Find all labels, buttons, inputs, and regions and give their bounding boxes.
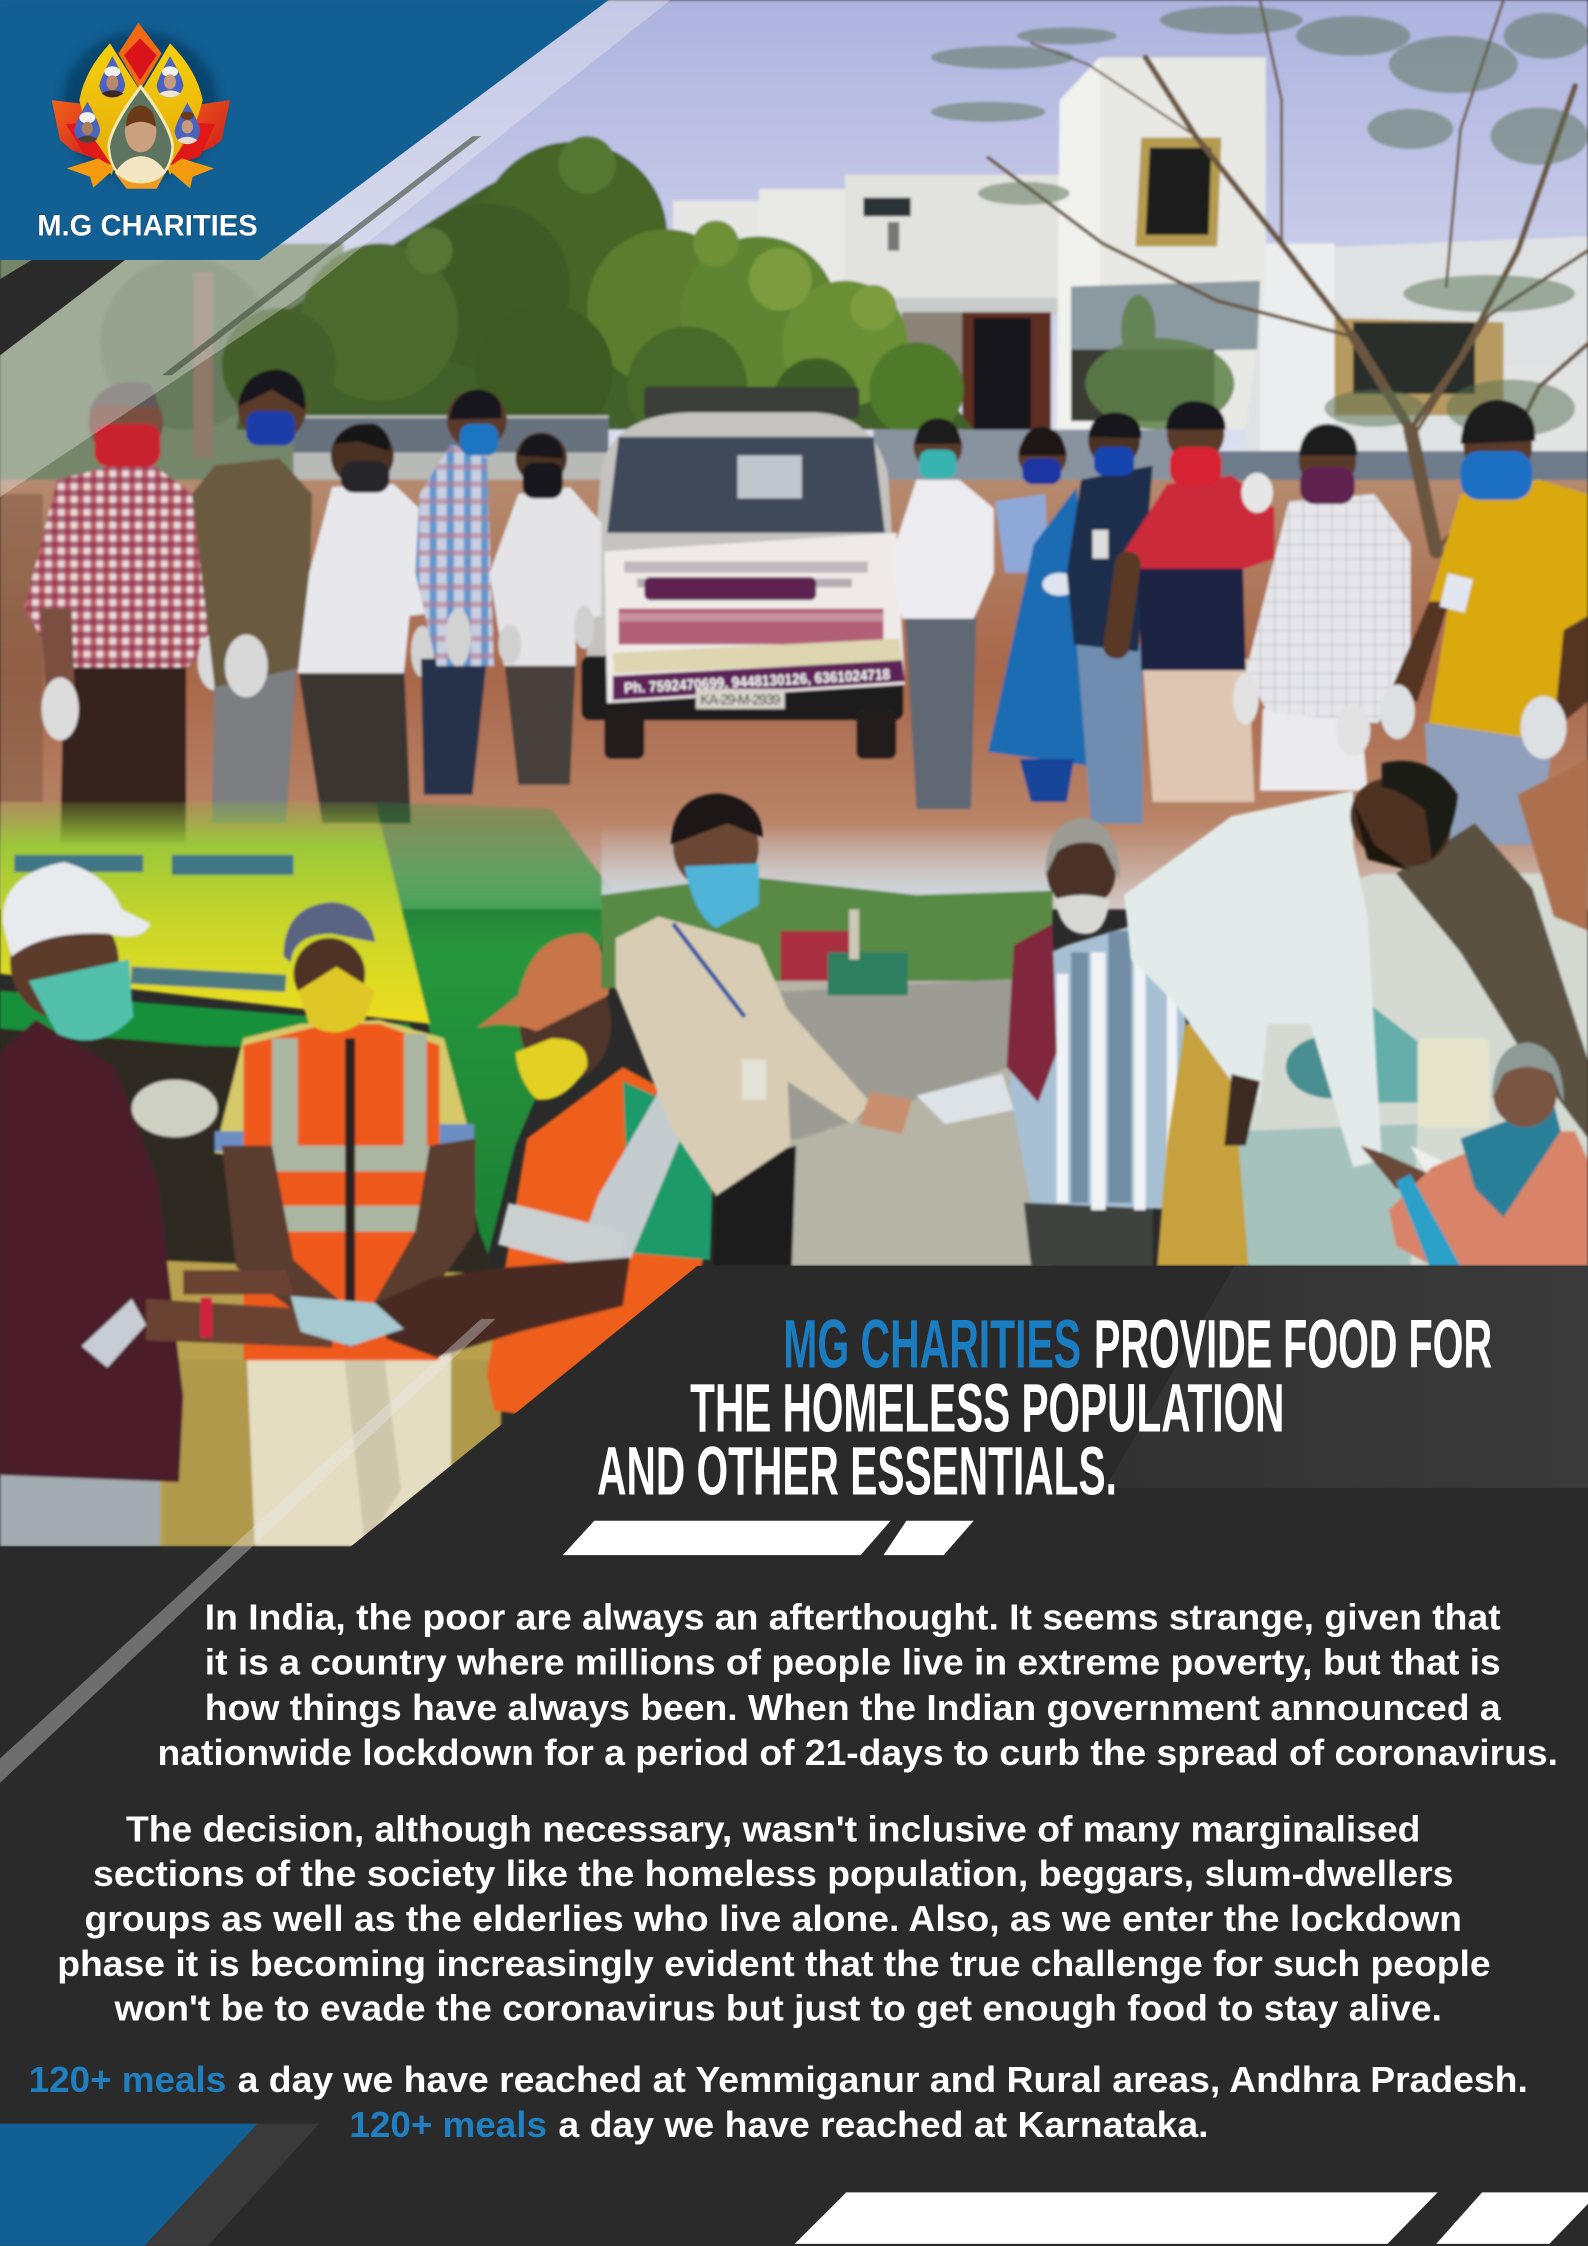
compound wall [294,415,1588,501]
elderly man in striped shirt [916,818,1191,1266]
sack under truck [132,1080,218,1137]
volunteer in cream shirt with blue mask [616,793,912,1266]
text block: paragraph two: The decision, although necessary, wasn't inclusive of many marginalised [126,1810,1420,1850]
soft sky patch [601,823,1074,895]
truck lower green band [0,991,437,1053]
diagonal light stripe [0,1319,495,1783]
shrub by tower [1085,295,1234,430]
translucent diagonal haze over top left of photo [0,0,670,497]
road [716,981,1052,1266]
central portrait drop [107,84,174,183]
volunteer in white shirt with black face cover [490,433,601,785]
ground [0,480,1588,909]
central tree canopy [222,136,974,447]
white slanted bars bottom right [795,2192,1588,2244]
sky [0,0,1588,487]
lighter angled panel behind heading [1105,1266,1588,1488]
man in red and navy t-shirt [1102,401,1274,802]
diagonal dark line in haze [162,136,481,375]
heading [597,1306,1492,1509]
photo: man handing food to elderly woman [1124,759,1588,1266]
top petal [118,23,162,90]
text block: paragraph one: how things have always been. When the Indian government announced a [205,1688,1502,1728]
inner petals [66,123,215,189]
text block: paragraph one: nationwide lockdown for a period of 21-days to curb the spread of coronavirus. [158,1733,1558,1773]
grey slanted band bottom left [145,2124,319,2246]
bare tree on the right [988,0,1588,551]
food parcel [1410,1146,1463,1196]
white slanted bars under heading [563,1521,974,1555]
banner [604,533,905,703]
shaded pavement [1234,1124,1418,1266]
man in maroon shirt [0,862,332,1547]
van with food distribution banner [581,387,905,759]
meals reached callout: a day we have reached at Karnataka. [558,2105,1209,2145]
photo: volunteers with van in front of house [0,0,1588,909]
text block: paragraph two: groups as well as the elderlies who live alone. Also, as we enter the lockdown [84,1899,1462,1939]
blue corner shape bottom left [0,2124,258,2246]
text block: paragraph two: sections of the society like the homeless population, beggars, slum-dwellers [93,1854,1453,1894]
man leaning in white shirt [1124,761,1465,1200]
right white building [1246,236,1588,473]
man in navy shirt [1067,412,1153,823]
food packet [291,1296,404,1346]
dark diagonal accent under header [0,259,126,355]
text block: paragraph one [158,1598,1558,1773]
worker in vest, center [215,902,475,1547]
number plate: KA-29-M-2939 [700,693,780,709]
yellow trousers [1157,1024,1249,1266]
text block: paragraph two: won't be to evade the coronavirus but just to get enough food to stay alive. [114,1989,1442,2029]
outer red petals [52,100,230,165]
tree trunk [1396,823,1588,1138]
truck side [143,802,616,1289]
dark text panel [0,1266,1588,2246]
worker in vest and orange cap, right [375,934,713,1418]
meals reached callout: 120+ meals [29,2060,226,2100]
truck shadow underside [0,988,501,1289]
man in yellow polo [1380,400,1588,845]
orange ground at far right [1518,759,1588,931]
text block: paragraph one: In India, the poor are always an afterthought. It seems strange, given that [205,1598,1501,1638]
tree foliage [931,6,1588,437]
heading: AND OTHER ESSENTIALS. [597,1432,1117,1509]
dry leaf ground [143,1260,501,1547]
brand name: M.G CHARITIES [37,210,258,243]
man in white checked shirt [1233,424,1410,791]
low white wing [673,175,1060,434]
blue header corner [0,0,609,260]
house wall backdrop [1234,874,1588,1266]
volunteer in blue plaid shirt [415,390,507,795]
meals reached callout: a day we have reached at Yemmiganur and Rural areas, Andhra Pradesh. [238,2060,1528,2100]
banner: Ph. 7592470699, 9448130126, 6361024718 [624,666,890,697]
photo: road, volunteer and elderly man [601,793,1191,1266]
meals reached callout [29,2060,1528,2145]
logo: M.G Charities lotus emblem [52,23,230,189]
volunteer group, left [24,370,601,845]
small portrait drops [74,56,200,144]
yellow petals [79,43,203,175]
woman in blue saree [988,427,1091,802]
roadside bushes [601,876,1052,988]
red truck and green bins [780,909,908,995]
man in white shirt and teal mask [891,418,994,809]
distant hazy trees [0,244,344,494]
logo glow [62,32,218,182]
volunteer in olive jacket [192,370,312,823]
truck lettering bars [14,855,294,992]
meals reached callout: 120+ meals [349,2105,547,2145]
volunteer group, right [891,400,1588,845]
text block: paragraph two: phase it is becoming increasingly evident that the true challenge for such people [57,1944,1491,1984]
teal sacks and bucket [1286,1002,1489,1127]
text block: paragraph one: it is a country where millions of people live in extreme poverty, but that is [205,1643,1501,1683]
photo: sanitation workers and green truck [0,802,713,1547]
volunteer in white shirt and black mask [298,424,434,823]
text block: paragraph two [57,1810,1491,2029]
tower building [1057,57,1266,430]
volunteer in red mask and plaid shirt [24,382,232,845]
truck yellow panel [0,802,430,1024]
heading: MG CHARITIES [783,1306,1081,1383]
elderly woman in orange sari [1389,1043,1588,1266]
